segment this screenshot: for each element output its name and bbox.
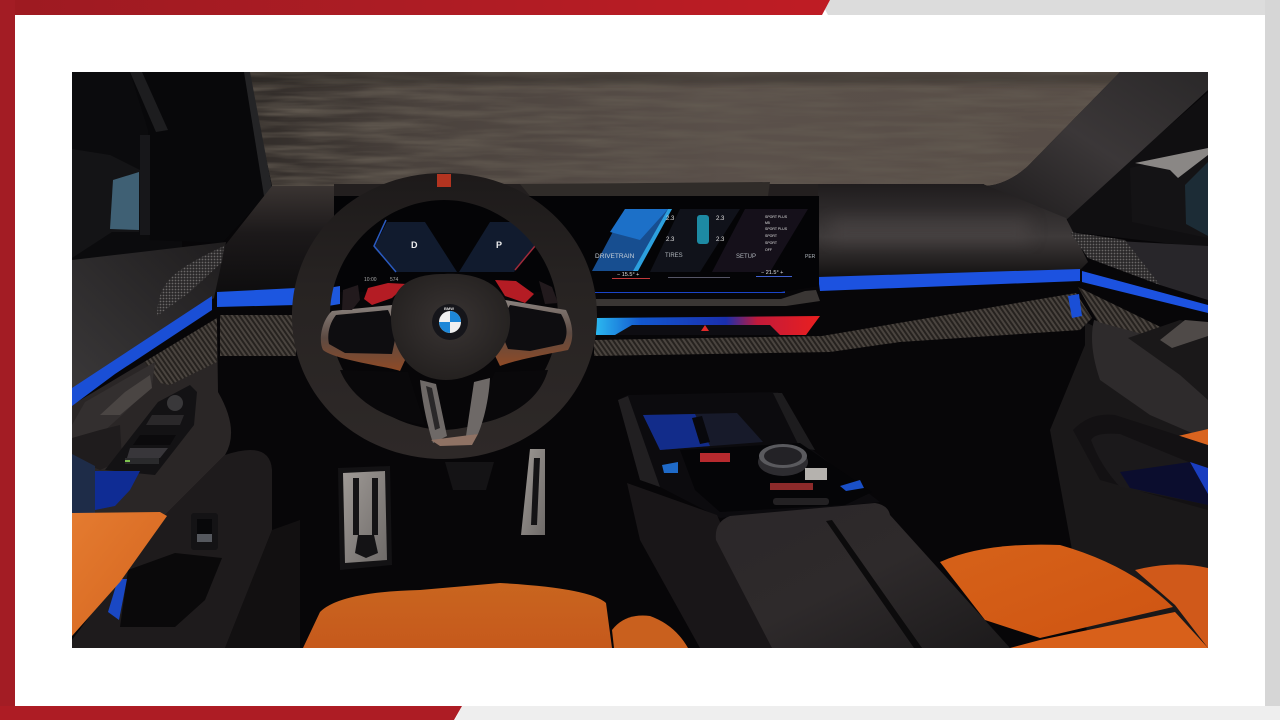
dashboard left section	[212, 186, 334, 292]
setup panel	[712, 209, 816, 272]
blue dash light left	[217, 288, 296, 307]
central hub	[391, 274, 510, 380]
left door ambient blue light	[72, 296, 212, 406]
tires panel: TIRES	[665, 253, 683, 259]
frame: bottom red bar	[0, 706, 462, 720]
chrome strip	[590, 290, 820, 306]
left spoke	[321, 305, 412, 371]
lower spoke silver	[420, 378, 490, 446]
frame: top right gray bar	[820, 0, 1280, 15]
dashboard top strip above screen	[334, 184, 984, 197]
tires panel: 2.3	[716, 216, 725, 222]
left door lower panel	[72, 318, 231, 515]
right A pillar and window	[983, 72, 1208, 248]
footwell side panel	[225, 520, 300, 648]
left door seat switch	[191, 513, 218, 550]
tires panel: 2.3	[666, 216, 675, 222]
concrete wall seen through windshield	[240, 72, 1130, 188]
orange seats	[303, 545, 1208, 648]
climate bar	[612, 270, 792, 279]
main curved display	[334, 196, 819, 292]
setup panel: SPORT	[765, 234, 778, 238]
photo: car interior	[72, 72, 1208, 648]
center armrest	[627, 483, 1010, 648]
wheel rim	[292, 173, 597, 459]
tires panel: 2.3	[716, 237, 725, 243]
instrument cluster behind wheel	[328, 220, 535, 306]
carbon dash trim	[220, 293, 1092, 356]
instrument cluster behind wheel: P	[496, 240, 502, 250]
setup panel: SPORT PLUS	[765, 215, 788, 219]
steering wheel	[292, 173, 597, 459]
left A pillar	[130, 72, 272, 243]
instrument cluster behind wheel: 10:00	[364, 277, 377, 283]
right door ambient blue light	[1082, 271, 1208, 313]
wireless tray	[643, 413, 763, 450]
drivetrain panel	[592, 209, 672, 271]
left door orange armrest	[72, 512, 167, 636]
climate bar: − 15.5° +	[617, 272, 639, 278]
setup panel: SETUP	[736, 254, 756, 260]
setup panel: OFF	[765, 248, 772, 252]
drive controls	[680, 443, 872, 512]
setup panel: M5	[765, 221, 770, 225]
center console	[618, 392, 880, 518]
lower wheel opening	[340, 370, 548, 425]
tires panel: 2.3	[666, 237, 675, 243]
pedals	[338, 449, 545, 570]
left side window and mirror	[72, 149, 140, 258]
left door upper panel	[72, 242, 226, 392]
frame: right gray bar	[1265, 0, 1280, 720]
lower control display	[596, 316, 820, 335]
frame: bottom right light bar	[455, 706, 1280, 720]
dash highlight	[838, 220, 1021, 232]
climate bar: − 21.5° +	[761, 270, 783, 276]
frame: top red bar	[0, 0, 830, 15]
right spoke	[485, 300, 572, 366]
left door lower trim and pocket	[72, 450, 272, 648]
left door window switches	[105, 385, 197, 475]
setup panel: SPORT	[765, 241, 778, 245]
blue dash light right	[818, 269, 1080, 291]
tires panel	[650, 209, 740, 272]
left door blue pocket glow	[72, 454, 140, 513]
instrument cluster behind wheel: D	[411, 240, 418, 250]
wheel top red marker	[437, 174, 451, 187]
dash top vent	[520, 182, 770, 196]
frame: left red bar	[0, 0, 15, 720]
blue strip inner end	[1068, 294, 1082, 318]
BMW logo	[432, 304, 468, 340]
instrument cluster behind wheel: 574	[390, 277, 399, 283]
setup panel: PER	[805, 254, 816, 260]
right side mirror	[1130, 148, 1208, 238]
red shift paddles	[342, 280, 558, 310]
left door carbon insert	[157, 246, 224, 316]
BMW logo: BMW	[444, 306, 454, 311]
setup panel: SPORT PLUS	[765, 227, 788, 231]
right door panel	[1050, 232, 1208, 648]
blue strip below screen	[595, 291, 785, 293]
dashboard center and right section	[819, 184, 1088, 277]
drivetrain panel: DRIVETRAIN	[595, 253, 635, 260]
